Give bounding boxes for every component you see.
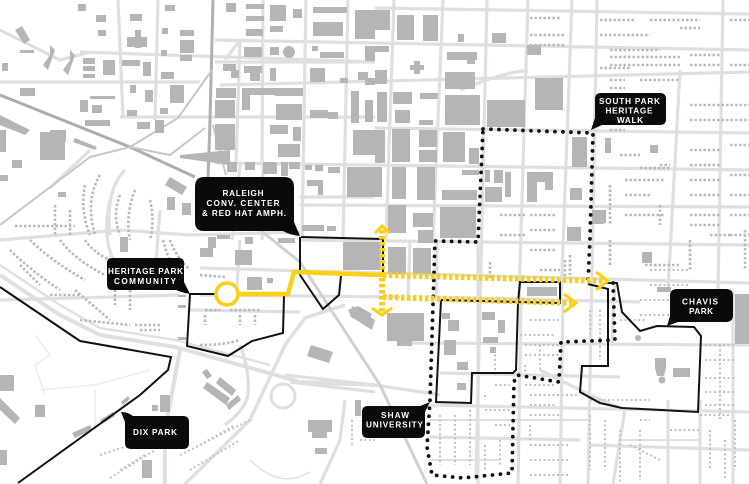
dotted horizontal route lower: [383, 297, 574, 303]
label: South Park Heritage Walk: WALK: [617, 116, 643, 125]
label: Raleigh Conv. Center: CONV. CENTER: [206, 199, 280, 208]
dotted vertical route: [379, 230, 385, 312]
label: South Park Heritage Walk: HERITAGE: [606, 106, 653, 116]
label: Dix Park: [121, 412, 189, 449]
label: Dix Park: DIX PARK: [133, 428, 177, 437]
arrowheads: [372, 226, 608, 315]
label: Shaw University: [362, 402, 430, 438]
dotted horizontal route upper: [383, 275, 606, 281]
boundary: Dix Park: [0, 287, 171, 483]
label: Chavis Park: CHAVIS: [682, 298, 719, 306]
label: Raleigh Conv. Center: [195, 177, 300, 236]
label: South Park Heritage Walk: [591, 93, 666, 130]
label: Heritage Park Community: COMMUNITY: [114, 277, 177, 286]
label: Shaw University: UNIVERSITY: [366, 420, 424, 430]
start marker: Heritage Park: [216, 283, 238, 305]
base map: residential house rows: [10, 18, 749, 345]
label: South Park Heritage Walk: SOUTH PARK: [599, 97, 660, 106]
label: Chavis Park: PARK: [689, 307, 713, 316]
yellow route: [238, 226, 608, 315]
boundary: neighborhood block: [436, 282, 560, 403]
base map: smaller house rows: [100, 270, 735, 484]
label: Heritage Park Community: [107, 258, 190, 294]
boundary: Chavis Park: [580, 283, 701, 412]
dotted route: South Park Heritage Walk: [427, 129, 615, 478]
boundary: Heritage Park Community: [187, 294, 284, 356]
label: Raleigh Conv. Center: & RED HAT AMPH.: [202, 209, 286, 218]
label: Heritage Park Community: HERITAGE PARK: [108, 267, 183, 276]
label: Raleigh Conv. Center: RALEIGH: [222, 189, 264, 198]
label: Shaw University: SHAW: [381, 411, 409, 420]
boundary: convention center: [300, 237, 383, 309]
base map: rail lines: [0, 0, 427, 484]
label: Chavis Park: [667, 289, 733, 326]
solid route line: [238, 272, 383, 294]
